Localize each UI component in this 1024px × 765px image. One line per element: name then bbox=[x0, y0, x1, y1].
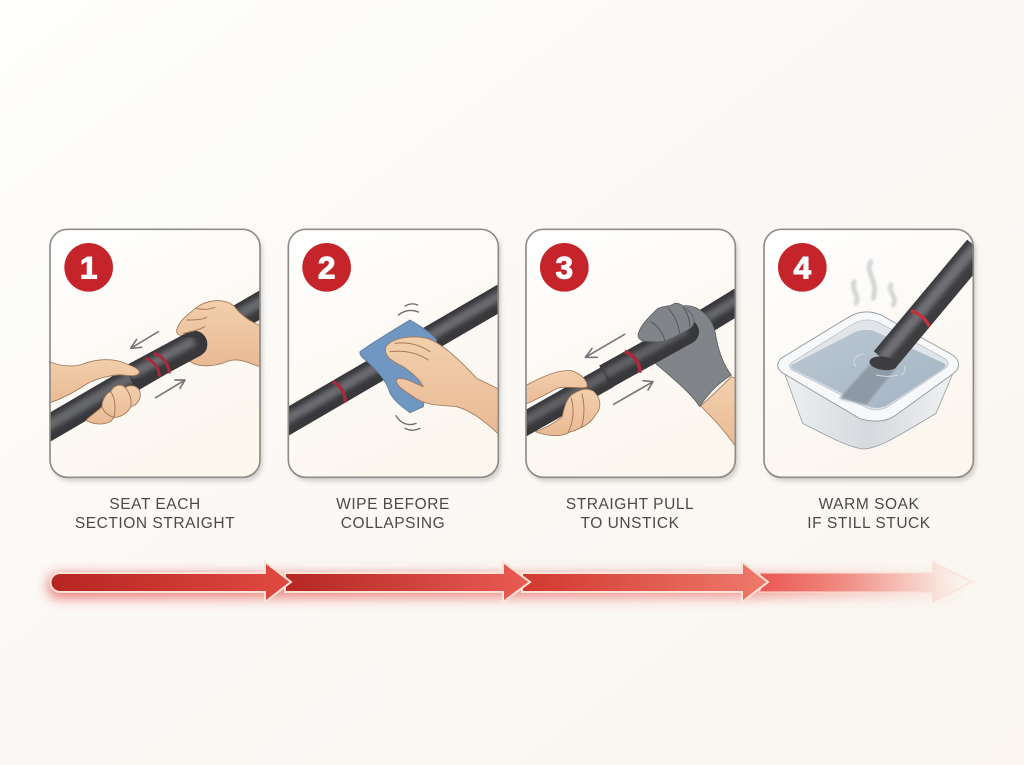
progress arrow bbox=[48, 562, 972, 602]
submerged pipe bbox=[839, 363, 897, 405]
upper pipe: step 3 bbox=[700, 288, 734, 330]
pipe joint with red rings bbox=[130, 331, 207, 378]
left hand bbox=[48, 360, 140, 424]
caption 1: SEAT EACH bbox=[109, 496, 201, 513]
gloved palm and arm bbox=[655, 306, 738, 450]
arrow segment 4 bbox=[760, 562, 972, 602]
ripples bbox=[854, 353, 905, 376]
blue cloth bbox=[360, 320, 437, 413]
number badge 1 bbox=[64, 243, 113, 292]
panel: step 3 bbox=[520, 229, 741, 481]
caption 4: IF STILL STUCK bbox=[807, 515, 931, 532]
steam bbox=[853, 262, 894, 305]
number badge 4 bbox=[778, 243, 827, 292]
panel: step 4 bbox=[764, 229, 978, 481]
arrow: pull left bbox=[585, 334, 625, 357]
wiping hand bbox=[385, 337, 501, 436]
arrow: pull right bbox=[614, 381, 653, 404]
infographic: four steps bbox=[0, 0, 978, 608]
caption 3: TO UNSTICK bbox=[580, 515, 680, 532]
basin bbox=[778, 312, 959, 449]
pipe: step 4 bbox=[869, 247, 978, 372]
right hand bbox=[177, 301, 261, 367]
caption 4: WARM SOAK bbox=[819, 496, 919, 513]
caption 3: STRAIGHT PULL bbox=[566, 496, 694, 513]
number badge 3 bbox=[540, 243, 589, 292]
number badge 4: 4 bbox=[794, 250, 812, 286]
motion lines bbox=[396, 304, 420, 430]
pipe: step 1 bbox=[43, 298, 267, 431]
arrow segment 2 bbox=[285, 562, 530, 602]
caption 1: SECTION STRAIGHT bbox=[75, 515, 235, 532]
pipe: step 2 bbox=[282, 292, 505, 425]
arrow segment 3 bbox=[522, 562, 768, 602]
panel: step 2 bbox=[282, 229, 505, 481]
arrow: push left bbox=[131, 332, 158, 348]
arrow segment 1 bbox=[51, 562, 291, 602]
panel: step 1 bbox=[43, 229, 267, 481]
arrow: push right bbox=[156, 380, 185, 398]
caption 2: COLLAPSING bbox=[341, 515, 445, 532]
caption 2: WIPE BEFORE bbox=[336, 496, 450, 513]
number badge 1: 1 bbox=[80, 250, 97, 286]
pipe: step 3 bbox=[520, 319, 699, 427]
left hand bbox=[524, 371, 600, 436]
gloved fingers bbox=[638, 303, 694, 342]
number badge 2 bbox=[302, 243, 351, 292]
number badge 3: 3 bbox=[556, 250, 573, 286]
number badge 2: 2 bbox=[318, 250, 335, 286]
